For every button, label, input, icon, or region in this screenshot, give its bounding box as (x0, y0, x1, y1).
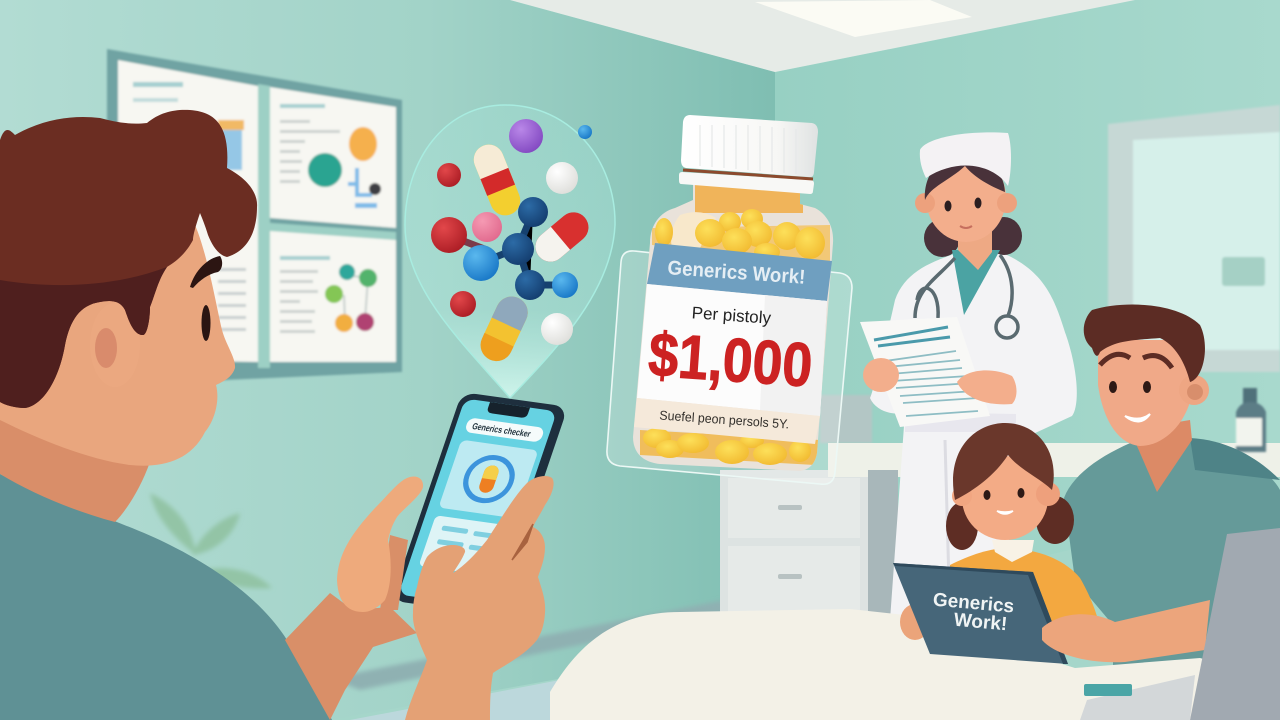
phone body (391, 392, 568, 615)
bottle cap (681, 115, 818, 179)
girl face (962, 456, 1048, 540)
bottle body (633, 183, 833, 471)
tablet text: Generics (932, 590, 1015, 618)
glass card behind bottle (607, 251, 852, 484)
phone pill icon (460, 455, 518, 504)
man face (1098, 340, 1190, 446)
girl (946, 423, 1098, 625)
foreground table (550, 609, 1280, 720)
doctor face (926, 154, 1006, 242)
doctor cap (920, 132, 1011, 186)
girl shirt (950, 548, 1098, 625)
person ear (90, 303, 140, 387)
girl hair (953, 423, 1054, 500)
person face (0, 215, 235, 466)
laptop (1080, 528, 1280, 720)
tablet (893, 563, 1068, 664)
tablet: Work! (953, 610, 1008, 635)
phone list card (419, 515, 513, 577)
man's hand and arm (1042, 600, 1210, 662)
bottle on counter (1236, 388, 1266, 452)
marker on table (1084, 684, 1132, 696)
man hair (1084, 305, 1205, 382)
wall poster (107, 49, 402, 380)
label heading: Generics Work! (667, 257, 806, 289)
doctor coat (870, 252, 1077, 620)
man (1064, 305, 1280, 720)
molecule bonds (448, 212, 565, 285)
person hair (0, 110, 257, 408)
doctor hands (863, 358, 1016, 404)
doctor neck and scrubs (952, 250, 1000, 315)
person's arm and holding hand (285, 476, 423, 720)
phone card (438, 440, 538, 518)
cabinet and counter (720, 395, 1280, 622)
person neck (0, 410, 150, 522)
phone screen (398, 399, 557, 607)
doctor (860, 132, 1077, 620)
stethoscope (915, 255, 1018, 338)
bubble shape (405, 105, 615, 398)
phone header text: Generics checker (471, 421, 532, 439)
bottle label white area (637, 284, 827, 416)
poster panel 1 (118, 60, 258, 362)
right wall window (1108, 105, 1280, 372)
bottle pills (640, 183, 830, 465)
person shirt (0, 474, 332, 720)
person eyebrow (190, 256, 222, 288)
bottle label blue band (647, 243, 832, 301)
molecule balls (431, 119, 592, 345)
doctor hair buns (924, 217, 1022, 257)
person eye (202, 305, 210, 341)
label subheading: Per pistoly (691, 303, 772, 328)
man shirt (1064, 435, 1280, 720)
capsule: white red (529, 206, 595, 268)
person with phone (0, 110, 332, 720)
pill bottle (633, 115, 833, 471)
phone header pill (464, 417, 545, 443)
man neck (1130, 420, 1192, 492)
label footer: Suefel peon persols 5Y. (659, 407, 790, 432)
document (860, 317, 990, 427)
floating molecule bubble (405, 105, 615, 398)
poster panel 2 (270, 87, 396, 228)
plant in background (150, 493, 272, 588)
capsule: yellow grey (475, 291, 533, 366)
girl pigtails (946, 496, 1074, 550)
smartphone (391, 392, 568, 615)
bottle collar (679, 172, 814, 194)
poster panel 3 (270, 231, 396, 362)
label price: $1,000 (646, 320, 815, 401)
bottle label cream strip (634, 398, 820, 444)
person's pointing hand (405, 476, 554, 720)
capsule: cream red yellow (469, 140, 525, 220)
